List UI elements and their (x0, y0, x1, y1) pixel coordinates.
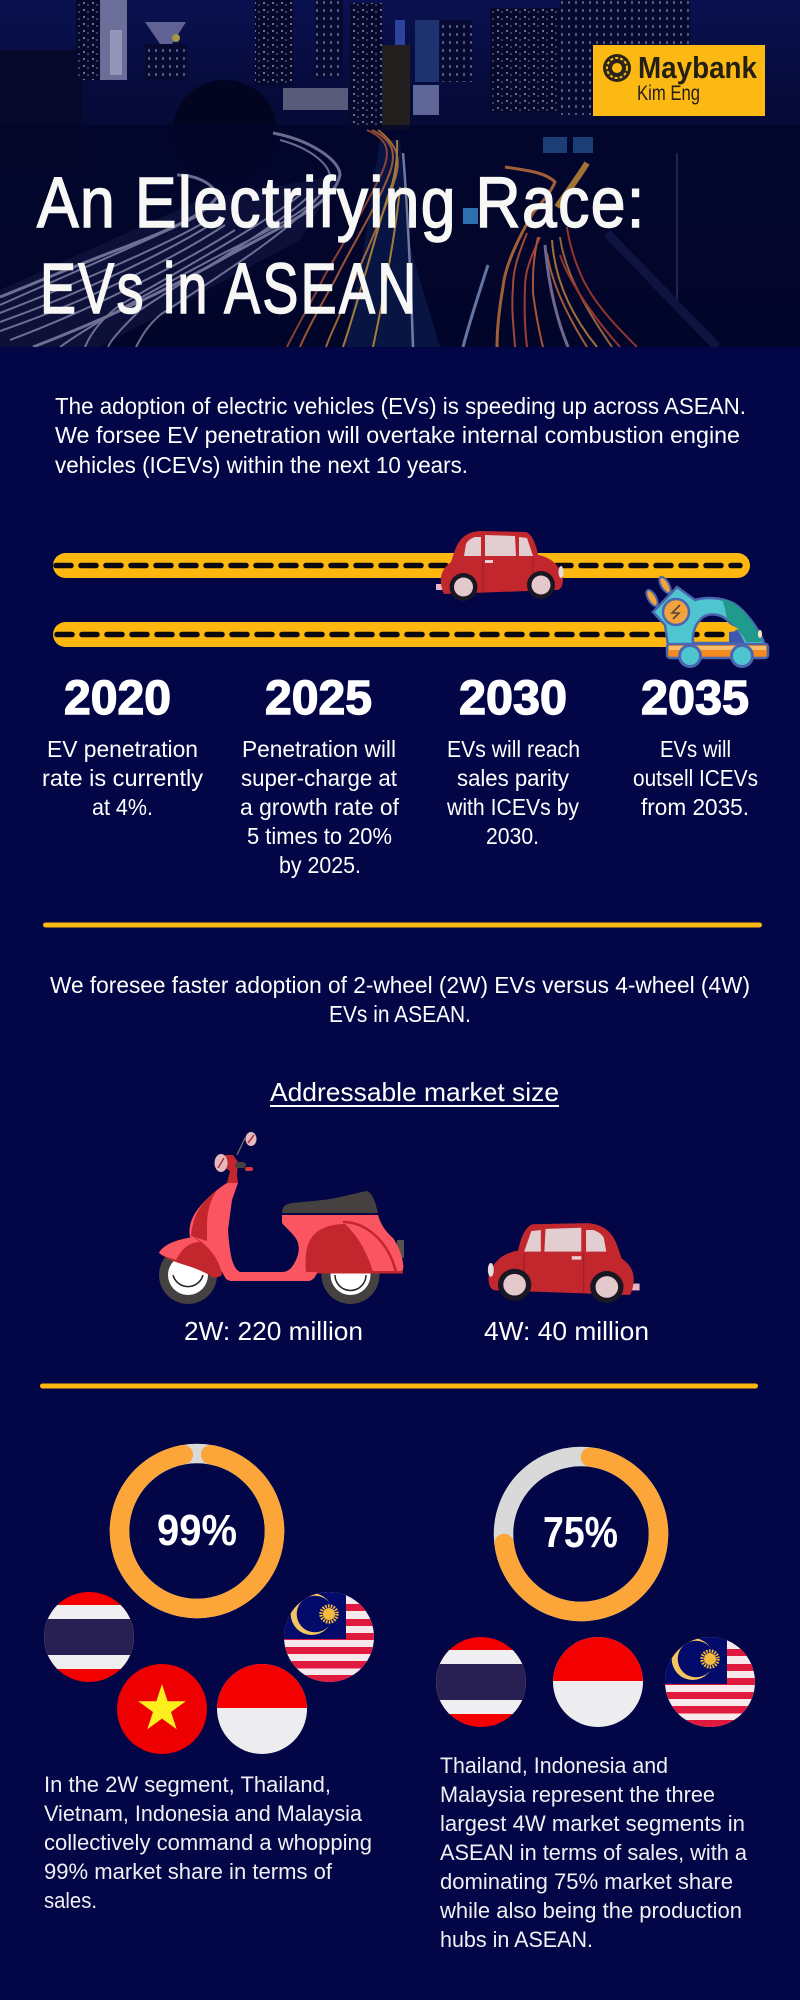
text: 4W segment: Thailand, Indonesia and (440, 1753, 668, 1778)
statement text: EVs in ASEAN. (329, 1001, 471, 1027)
flag: Malaysia, 4W (665, 1637, 755, 1727)
timeline text: 2030: 2030. (486, 823, 539, 849)
text: 2W segment: 99% market share in terms of (44, 1859, 333, 1884)
text: 2W segment: In the 2W segment, Thailand, (44, 1772, 331, 1797)
text: 2W segment: collectively command a whopping (44, 1830, 372, 1855)
text: 4W segment: while also being the production (439, 1898, 742, 1923)
logo: Maybank Kim Eng: Kim Eng (637, 82, 700, 105)
timeline text: 2030 (446, 736, 580, 849)
text: 2W segment (44, 1772, 372, 1913)
logo: Maybank Kim Eng (593, 45, 765, 116)
label: 2W market: 2W: 220 million (184, 1316, 363, 1346)
timeline text: 2035: outsell ICEVs (633, 765, 758, 791)
heading: addressable market size: Addressable market size (270, 1077, 559, 1107)
text: 4W segment (439, 1753, 748, 1952)
flag: Indonesia (217, 1664, 307, 1754)
intro text (55, 393, 746, 478)
timeline text: 2025: Penetration will (242, 736, 396, 762)
flag: Thailand, 4W (436, 1637, 526, 1727)
timeline text: 2025: a growth rate of (240, 794, 400, 820)
icon: red scooter (159, 1132, 404, 1304)
road 2 (53, 622, 750, 647)
timeline text: 2030: EVs will reach (447, 736, 580, 762)
text: 2W segment: sales. (44, 1888, 97, 1913)
icon: red car, 4W (488, 1223, 640, 1303)
text: 4W segment: Malaysia represent the three (440, 1782, 715, 1807)
timeline text: 2020: at 4%. (92, 794, 153, 820)
year labels: 2030 (459, 672, 567, 725)
statement text: We foresee faster adoption of 2-wheel (2W) EVs versus 4-wheel (4W) (50, 972, 750, 998)
flag: Malaysia (284, 1592, 374, 1682)
flag: Vietnam (117, 1664, 207, 1754)
text: 4W segment: ASEAN in terms of sales, with a (440, 1840, 748, 1865)
statement text (50, 972, 750, 1027)
timeline text: 2025: 5 times to 20% (247, 823, 392, 849)
donut chart: 75%: 75% (543, 1508, 618, 1557)
timeline text: 2025: by 2025. (279, 852, 361, 878)
title (37, 163, 644, 329)
year labels: 2020 (64, 672, 171, 725)
intro text: vehicles (ICEVs) within the next 10 years. (55, 452, 468, 478)
text: 2W segment: Vietnam, Indonesia and Malaysia (44, 1801, 363, 1826)
timeline text: 2035: from 2035. (641, 794, 749, 820)
label: 4W market: 4W: 40 million (484, 1316, 649, 1346)
timeline text: 2030: with ICEVs by (446, 794, 579, 820)
year labels: 2035 (641, 672, 749, 725)
title: An Electrifying Race: (37, 163, 644, 243)
road 1 (53, 553, 750, 578)
donut chart: 99% (120, 1454, 274, 1608)
intro text: The adoption of electric vehicles (EVs) is speeding up across ASEAN. (55, 393, 746, 419)
intro text: We forsee EV penetration will overtake internal combustion engine (55, 422, 740, 448)
logo: Maybank Kim Eng: Maybank (638, 50, 758, 85)
icon: red car on road (436, 531, 564, 601)
flag: Indonesia, 4W (553, 1637, 643, 1727)
donut chart: 99%: 99% (157, 1506, 237, 1555)
text: 4W segment: largest 4W market segments in (440, 1811, 745, 1836)
flag: Thailand (44, 1592, 134, 1682)
timeline text: 2025 (240, 736, 400, 878)
donut chart: 75% (504, 1456, 659, 1612)
timeline text: 2035: EVs will (660, 736, 731, 762)
timeline text: 2030: sales parity (457, 765, 569, 791)
timeline text: 2020 (42, 736, 204, 820)
icon: electric plug car (644, 575, 768, 666)
title: EVs in ASEAN (40, 250, 416, 329)
year labels (64, 672, 749, 725)
text: 4W segment: hubs in ASEAN. (440, 1927, 593, 1952)
year labels: 2025 (265, 672, 372, 725)
text: 4W segment: dominating 75% market share (440, 1869, 733, 1894)
timeline text: 2020: EV penetration (47, 736, 198, 762)
timeline text: 2020: rate is currently (42, 765, 204, 791)
header photo: night city highway (0, 0, 800, 347)
timeline text: 2035 (633, 736, 758, 820)
timeline text: 2025: super-charge at (241, 765, 398, 791)
